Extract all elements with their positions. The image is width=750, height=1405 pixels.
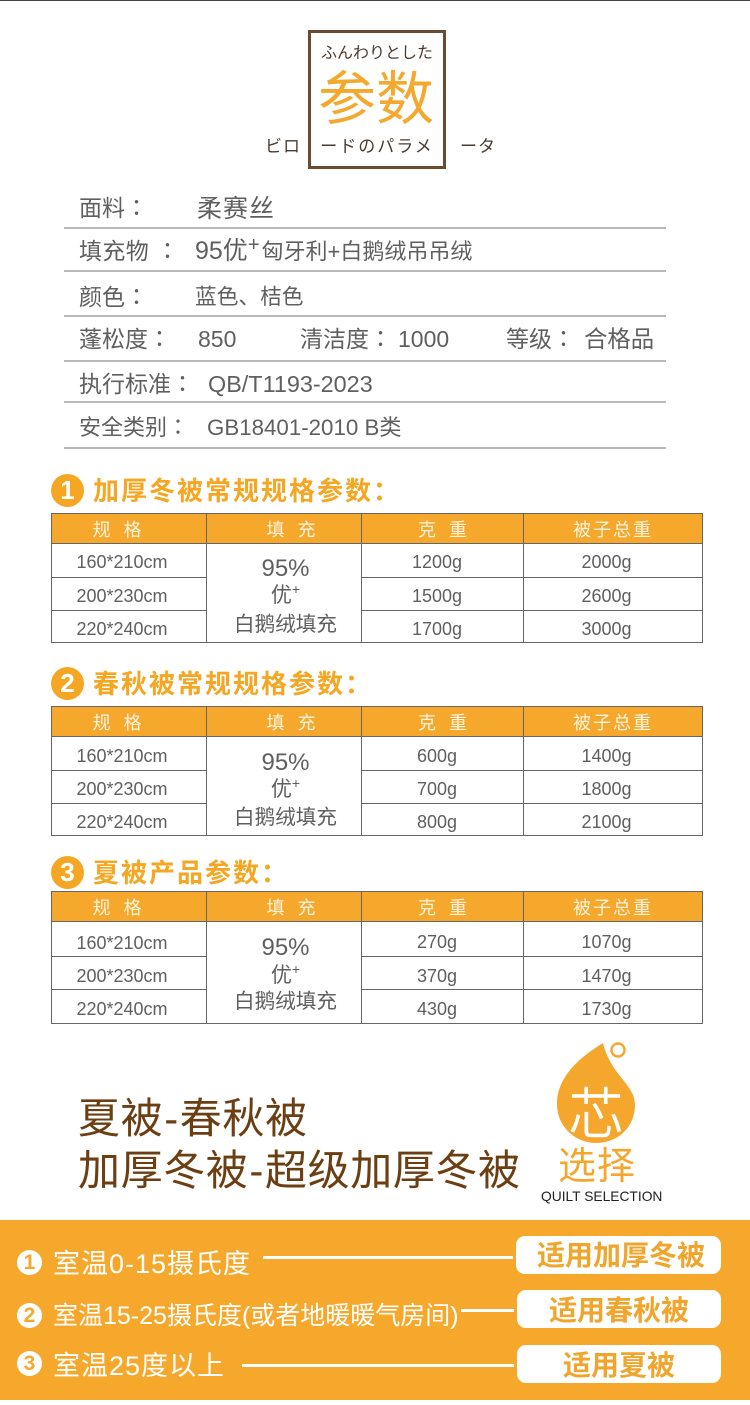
- table: summer quilt: 1730g: [581, 999, 632, 1019]
- table: thick winter quilt: 200*230cm: [76, 586, 168, 606]
- table: summer quilt: 95%: [261, 934, 310, 961]
- condition 3: 室温25度以上: [53, 1351, 225, 1381]
- icon: circled 3: [17, 1351, 42, 1376]
- table: thick winter quilt: 3000g: [581, 619, 632, 639]
- table: thick winter quilt: [51, 513, 703, 643]
- table: summer quilt: [51, 891, 703, 1024]
- table: spring autumn quilt: 填 充: [266, 713, 316, 733]
- badge caption centre: ードのパラメ: [320, 137, 434, 156]
- table: spring autumn quilt: 700g: [417, 779, 457, 799]
- panel: usage by room temperature: [0, 1220, 750, 1400]
- icon: drop with 芯: [556, 1042, 635, 1146]
- table: summer quilt: 160*210cm: [76, 933, 168, 953]
- table: spring autumn quilt: 800g: [417, 812, 457, 832]
- table: thick winter quilt: 白鹅绒填充: [234, 613, 337, 636]
- badge caption left: ビロ: [265, 137, 301, 156]
- condition 1: 室温0-15摄氏度: [53, 1249, 251, 1279]
- connector 3: [242, 1364, 514, 1367]
- top edge line: [0, 0, 750, 1]
- table: summer quilt: 填 充: [266, 898, 316, 918]
- badge frame: [308, 30, 446, 169]
- button: summer quilt: 适用夏被: [563, 1350, 675, 1381]
- badge subtitle: ふんわりとした: [321, 45, 433, 62]
- table: thick winter quilt: 95%: [261, 555, 310, 582]
- filling value: 95优+匈牙利+白鹅绒吊吊绒: [195, 234, 472, 265]
- table: summer quilt: 被子总重: [573, 898, 653, 918]
- safety value: GB18401-2010 B类: [207, 415, 402, 440]
- connector 1: [263, 1256, 513, 1259]
- table: thick winter quilt: 2000g: [581, 552, 632, 572]
- cleanliness label: 清洁度：: [300, 326, 392, 352]
- row: filling: 填充物 ：: [79, 238, 179, 264]
- table: spring autumn quilt: 160*210cm: [76, 746, 168, 766]
- table: summer quilt: 200*230cm: [76, 966, 168, 986]
- button: thick winter quilt: [516, 1236, 721, 1274]
- table: summer quilt: 370g: [417, 966, 457, 986]
- table: spring autumn quilt: 2100g: [581, 812, 632, 832]
- logo: quilt selection: [541, 1042, 662, 1204]
- button: summer quilt: [517, 1345, 721, 1383]
- table: thick winter quilt: 克 重: [418, 520, 467, 540]
- table: spring autumn quilt: 95%: [261, 749, 310, 776]
- row: fill power: 蓬松度：: [79, 326, 171, 352]
- table: thick winter quilt: 规 格: [92, 520, 142, 540]
- icon: number 2: 2: [60, 668, 75, 698]
- fabric value: 柔赛丝: [197, 195, 275, 223]
- table: summer quilt: 优+: [271, 961, 300, 987]
- icon: number 2: [51, 667, 84, 700]
- table: spring autumn quilt: 克 重: [418, 713, 467, 733]
- cleanliness value: 1000: [398, 326, 449, 352]
- grade label: 等级：: [506, 326, 575, 352]
- table: spring autumn quilt: 600g: [417, 746, 457, 766]
- table: summer quilt: 430g: [417, 999, 457, 1019]
- row: standard: 执行标准：: [79, 371, 194, 397]
- icon: circled 2: 2: [24, 1304, 35, 1327]
- table: summer quilt: 1470g: [581, 966, 632, 986]
- heading: spring autumn quilt: 春秋被常规规格参数：: [93, 669, 373, 699]
- logo wordmark: 选择: [558, 1146, 636, 1188]
- row: colour: 颜色：: [79, 284, 148, 310]
- icon: drop with 芯: 芯: [568, 1083, 624, 1146]
- table: spring autumn quilt: 优+: [271, 775, 300, 801]
- icon: number 3: [51, 856, 84, 889]
- table: summer quilt: 270g: [417, 932, 457, 952]
- table: spring autumn quilt: 1400g: [581, 746, 632, 766]
- icon: number 1: [51, 474, 84, 507]
- button: spring autumn quilt: [517, 1290, 721, 1328]
- table: thick winter quilt: 160*210cm: [76, 552, 168, 572]
- table: summer quilt: 白鹅绒填充: [234, 990, 337, 1013]
- condition 2: 室温15-25摄氏度(或者地暖暖气房间): [53, 1302, 459, 1330]
- badge caption right: ータ: [460, 137, 496, 156]
- icon: number 3: 3: [60, 857, 75, 887]
- table: spring autumn quilt: 1800g: [581, 779, 632, 799]
- table: summer quilt: 220*240cm: [76, 999, 168, 1019]
- table: thick winter quilt: 1700g: [412, 619, 462, 639]
- icon: number 1: 1: [60, 475, 75, 505]
- heading: summer quilt: 夏被产品参数：: [93, 858, 289, 888]
- table: spring autumn quilt: 白鹅绒填充: [234, 806, 337, 829]
- button: spring autumn quilt: 适用春秋被: [549, 1295, 689, 1326]
- table: spring autumn quilt: 200*230cm: [76, 779, 168, 799]
- icon: circled 3: 3: [24, 1352, 35, 1375]
- grade value: 合格品: [584, 326, 654, 352]
- icon: circled 1: [17, 1250, 42, 1275]
- table: summer quilt: 1070g: [581, 932, 632, 952]
- table: thick winter quilt: 220*240cm: [76, 619, 168, 639]
- colour value: 蓝色、桔色: [195, 284, 303, 309]
- table: spring autumn quilt: 220*240cm: [76, 812, 168, 832]
- fill power value: 850: [198, 326, 236, 352]
- standard value: QB/T1193-2023: [208, 371, 373, 397]
- table: thick winter quilt: 1500g: [412, 586, 462, 606]
- table: thick winter quilt: 1200g: [412, 552, 462, 572]
- heading: thick winter quilt: 加厚冬被常规规格参数：: [93, 476, 401, 506]
- icon: circled 2: [17, 1303, 42, 1328]
- logo english text: QUILT SELECTION: [541, 1189, 662, 1204]
- line one: 夏被-春秋被: [78, 1095, 308, 1142]
- table: thick winter quilt: 2600g: [581, 586, 632, 606]
- table: summer quilt: 克 重: [418, 898, 467, 918]
- connector 2: [461, 1309, 514, 1312]
- table: thick winter quilt: 优+: [271, 581, 300, 607]
- table: spring autumn quilt: 规 格: [92, 713, 142, 733]
- line two: 加厚冬被-超级加厚冬被: [78, 1147, 521, 1194]
- table: thick winter quilt: 被子总重: [573, 520, 653, 540]
- heading: parameters: 参数: [318, 67, 434, 132]
- panel: material specs: [79, 195, 654, 440]
- row: safety class: 安全类别：: [79, 415, 189, 440]
- row: fabric: 面料：: [79, 195, 148, 221]
- table: spring autumn quilt: 被子总重: [573, 713, 653, 733]
- icon: circled 1: 1: [24, 1251, 35, 1274]
- title badge: [265, 30, 496, 169]
- button: thick winter quilt: 适用加厚冬被: [537, 1240, 705, 1271]
- quilt types text: [78, 1095, 521, 1194]
- table: summer quilt: 规 格: [92, 898, 142, 918]
- table: spring autumn quilt: [51, 706, 703, 836]
- table: thick winter quilt: 填 充: [266, 520, 316, 540]
